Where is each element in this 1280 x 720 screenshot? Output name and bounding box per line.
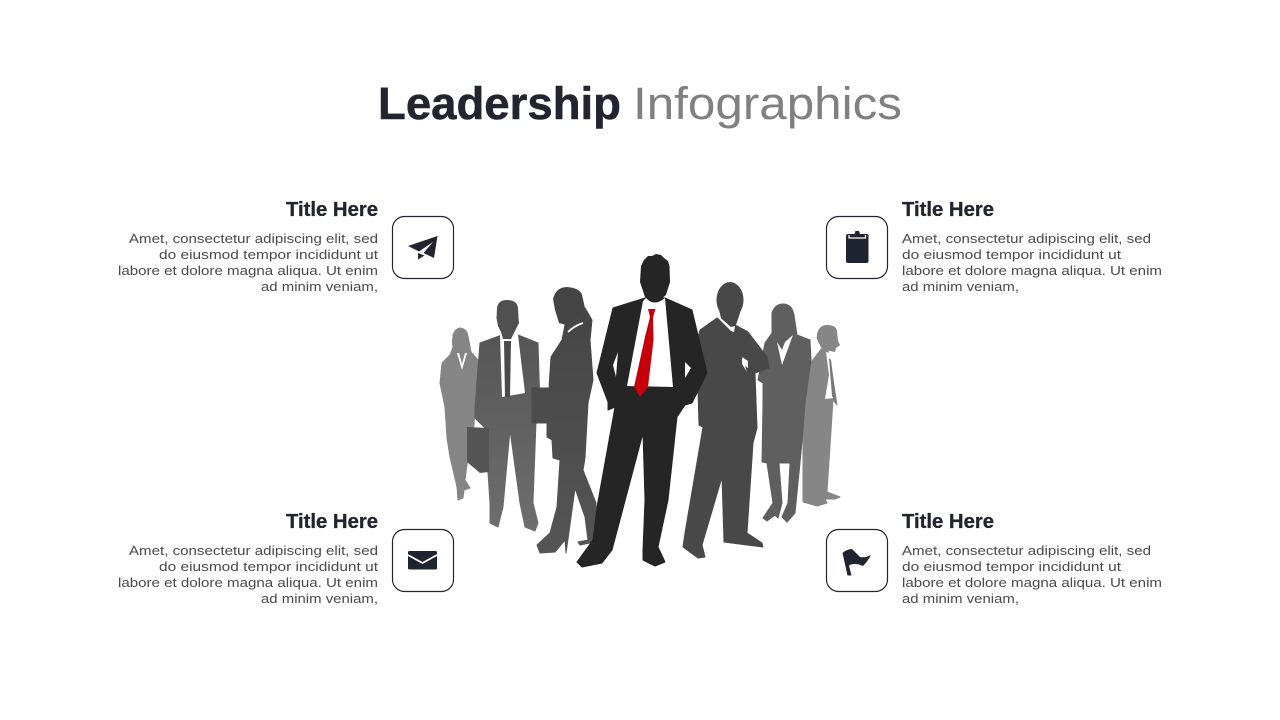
text block: bottom left [118, 543, 378, 606]
text block: top left [118, 231, 378, 294]
text block: bottom right: ad minim veniam, [902, 591, 1019, 606]
heading: top left: Title Here [286, 199, 378, 221]
icon: flag [826, 530, 888, 592]
panel: bottom left [118, 511, 454, 606]
text block: bottom right: labore et dolore magna aliqua. Ut enim [902, 575, 1162, 590]
text block: top left: labore et dolore magna aliqua. Ut enim [118, 263, 378, 278]
text block: top right: labore et dolore magna aliqua. Ut enim [902, 263, 1162, 278]
text block: top right: do eiusmod tempor incididunt ut [902, 247, 1121, 262]
icon: clipboard [826, 216, 888, 278]
panel: top left [118, 199, 454, 294]
pocket gaps [613, 352, 691, 378]
text block: top right: ad minim veniam, [902, 279, 1019, 294]
icon: envelope [392, 530, 454, 592]
figure: man with briefcase [467, 300, 540, 531]
text block: top left: Amet, consectetur adipiscing elit, sed [129, 231, 378, 246]
heading: top right: Title Here [902, 199, 994, 221]
panel: bottom right [826, 511, 1162, 606]
figure: far left woman [440, 328, 479, 500]
panel: top right [826, 199, 1162, 294]
title: Leadership [378, 78, 621, 129]
text block: bottom left: do eiusmod tempor incididunt ut [159, 559, 378, 574]
text block: top left: ad minim veniam, [261, 279, 378, 294]
figure: man with crossed arms [683, 282, 769, 558]
text block: bottom left: labore et dolore magna aliqua. Ut enim [118, 575, 378, 590]
heading: bottom right: Title Here [902, 511, 994, 533]
text block: bottom right: Amet, consectetur adipiscing elit, sed [902, 543, 1151, 558]
text block: bottom right [902, 543, 1162, 606]
text block: top left: do eiusmod tempor incididunt ut [159, 247, 378, 262]
figure: central man with red tie [577, 254, 707, 567]
title: Infographics [633, 78, 902, 129]
icon: paper plane [392, 216, 454, 278]
figure: woman in skirt suit [758, 304, 811, 522]
briefcase [467, 427, 489, 473]
group of business people silhouettes [440, 254, 840, 567]
text block: top right [902, 231, 1162, 294]
figure: far right man [803, 325, 840, 506]
text block: bottom right: do eiusmod tempor incididunt ut [902, 559, 1121, 574]
text block: bottom left: ad minim veniam, [261, 591, 378, 606]
red tie [634, 309, 656, 397]
title [378, 78, 902, 129]
text block: top right: Amet, consectetur adipiscing elit, sed [902, 231, 1151, 246]
figure: woman with folder [532, 287, 596, 553]
text block: bottom left: Amet, consectetur adipiscing elit, sed [129, 543, 378, 558]
heading: bottom left: Title Here [286, 511, 378, 533]
